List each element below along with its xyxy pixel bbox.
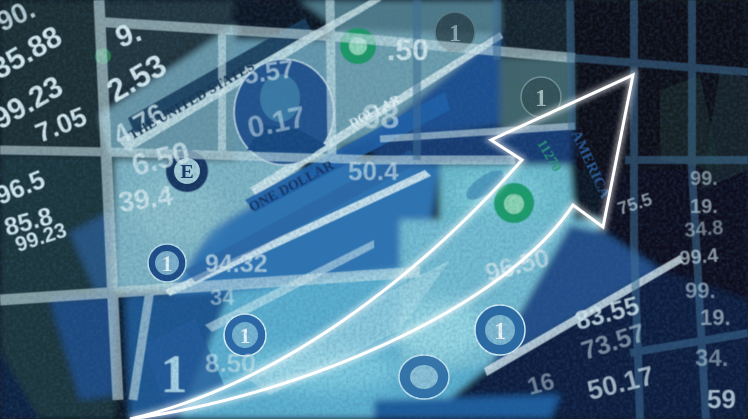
seal: dollar one centre [224,314,266,356]
arrow outline [130,75,633,419]
seal: dollar one left: 1 [162,251,172,276]
stock numbers: 34 [210,285,235,310]
stock numbers: 99.4 [679,245,720,270]
stock numbers: 94.32 [205,250,268,278]
stock numbers: 5.57 [242,53,296,90]
stock numbers: 50.4 [348,156,399,186]
stock numbers: 34. [695,345,728,372]
bill lettering [126,59,613,216]
seal: dollar one lower right: 1 [494,319,506,345]
seal: dollar one left [148,244,186,282]
seal: treasury E: E [180,161,194,183]
stock numbers: 73.57 [578,317,649,366]
seal: dollar one lower right [475,305,525,355]
stock numbers: 99. [690,168,718,190]
seal: large one lower left [143,318,224,408]
stock numbers: .68 [352,98,399,136]
green treasury seals [95,28,534,223]
darker grid on right [417,0,748,419]
stock numbers: 9. [111,15,146,55]
bill lettering: ONE DOLLAR [247,158,337,216]
lower right note edge and dark bills [484,70,748,376]
stock numbers: 8.50 [205,348,256,378]
stock numbers: 59 [707,384,736,414]
stock numbers: 4.76 [108,97,170,151]
stock numbers: 16 [525,368,557,401]
bill lettering: THE UNITED STATES [126,59,258,143]
stock numbers: 39.4 [117,180,175,218]
seal: one top right [435,12,561,117]
portrait: George Washington oval [234,59,334,165]
bill lettering: 11270 [534,138,564,175]
stock numbers: 99.23 [12,219,70,257]
seal: dollar one centre: 1 [240,323,250,348]
stock numbers: .50 [387,34,429,67]
stock numbers: 19. [700,305,731,330]
seal: dollar one bottom [399,355,449,399]
soft colour glows [130,175,545,392]
stock numbers: 19. [690,196,718,218]
arrow glow [130,75,633,419]
stock numbers: 7.05 [31,101,91,149]
arrow [130,75,633,419]
stock numbers: 96.50 [482,242,552,288]
seal: one top right: 1 [449,21,461,47]
seal: treasury E [166,150,208,192]
stock numbers: 50.17 [584,360,657,406]
seal: one top right: 1 [535,86,547,112]
stock numbers: 6.50 [128,136,193,183]
stock numbers: 83.55 [572,290,642,336]
stock numbers: 85.8 [1,202,56,242]
dollar bill edges and borders [118,0,503,395]
stock numbers: 75.5 [615,189,655,219]
bill lettering: DOLLAR [346,91,403,131]
bill lettering: AMERICA [567,128,613,201]
stock numbers: 2.53 [100,47,172,109]
seal: large one lower left: 1 [160,344,188,404]
stock numbers: 34.8 [684,217,724,242]
stock numbers: 0.17 [245,100,309,145]
window grid of pale lines [0,0,575,400]
stock numbers: 99. [685,278,716,303]
